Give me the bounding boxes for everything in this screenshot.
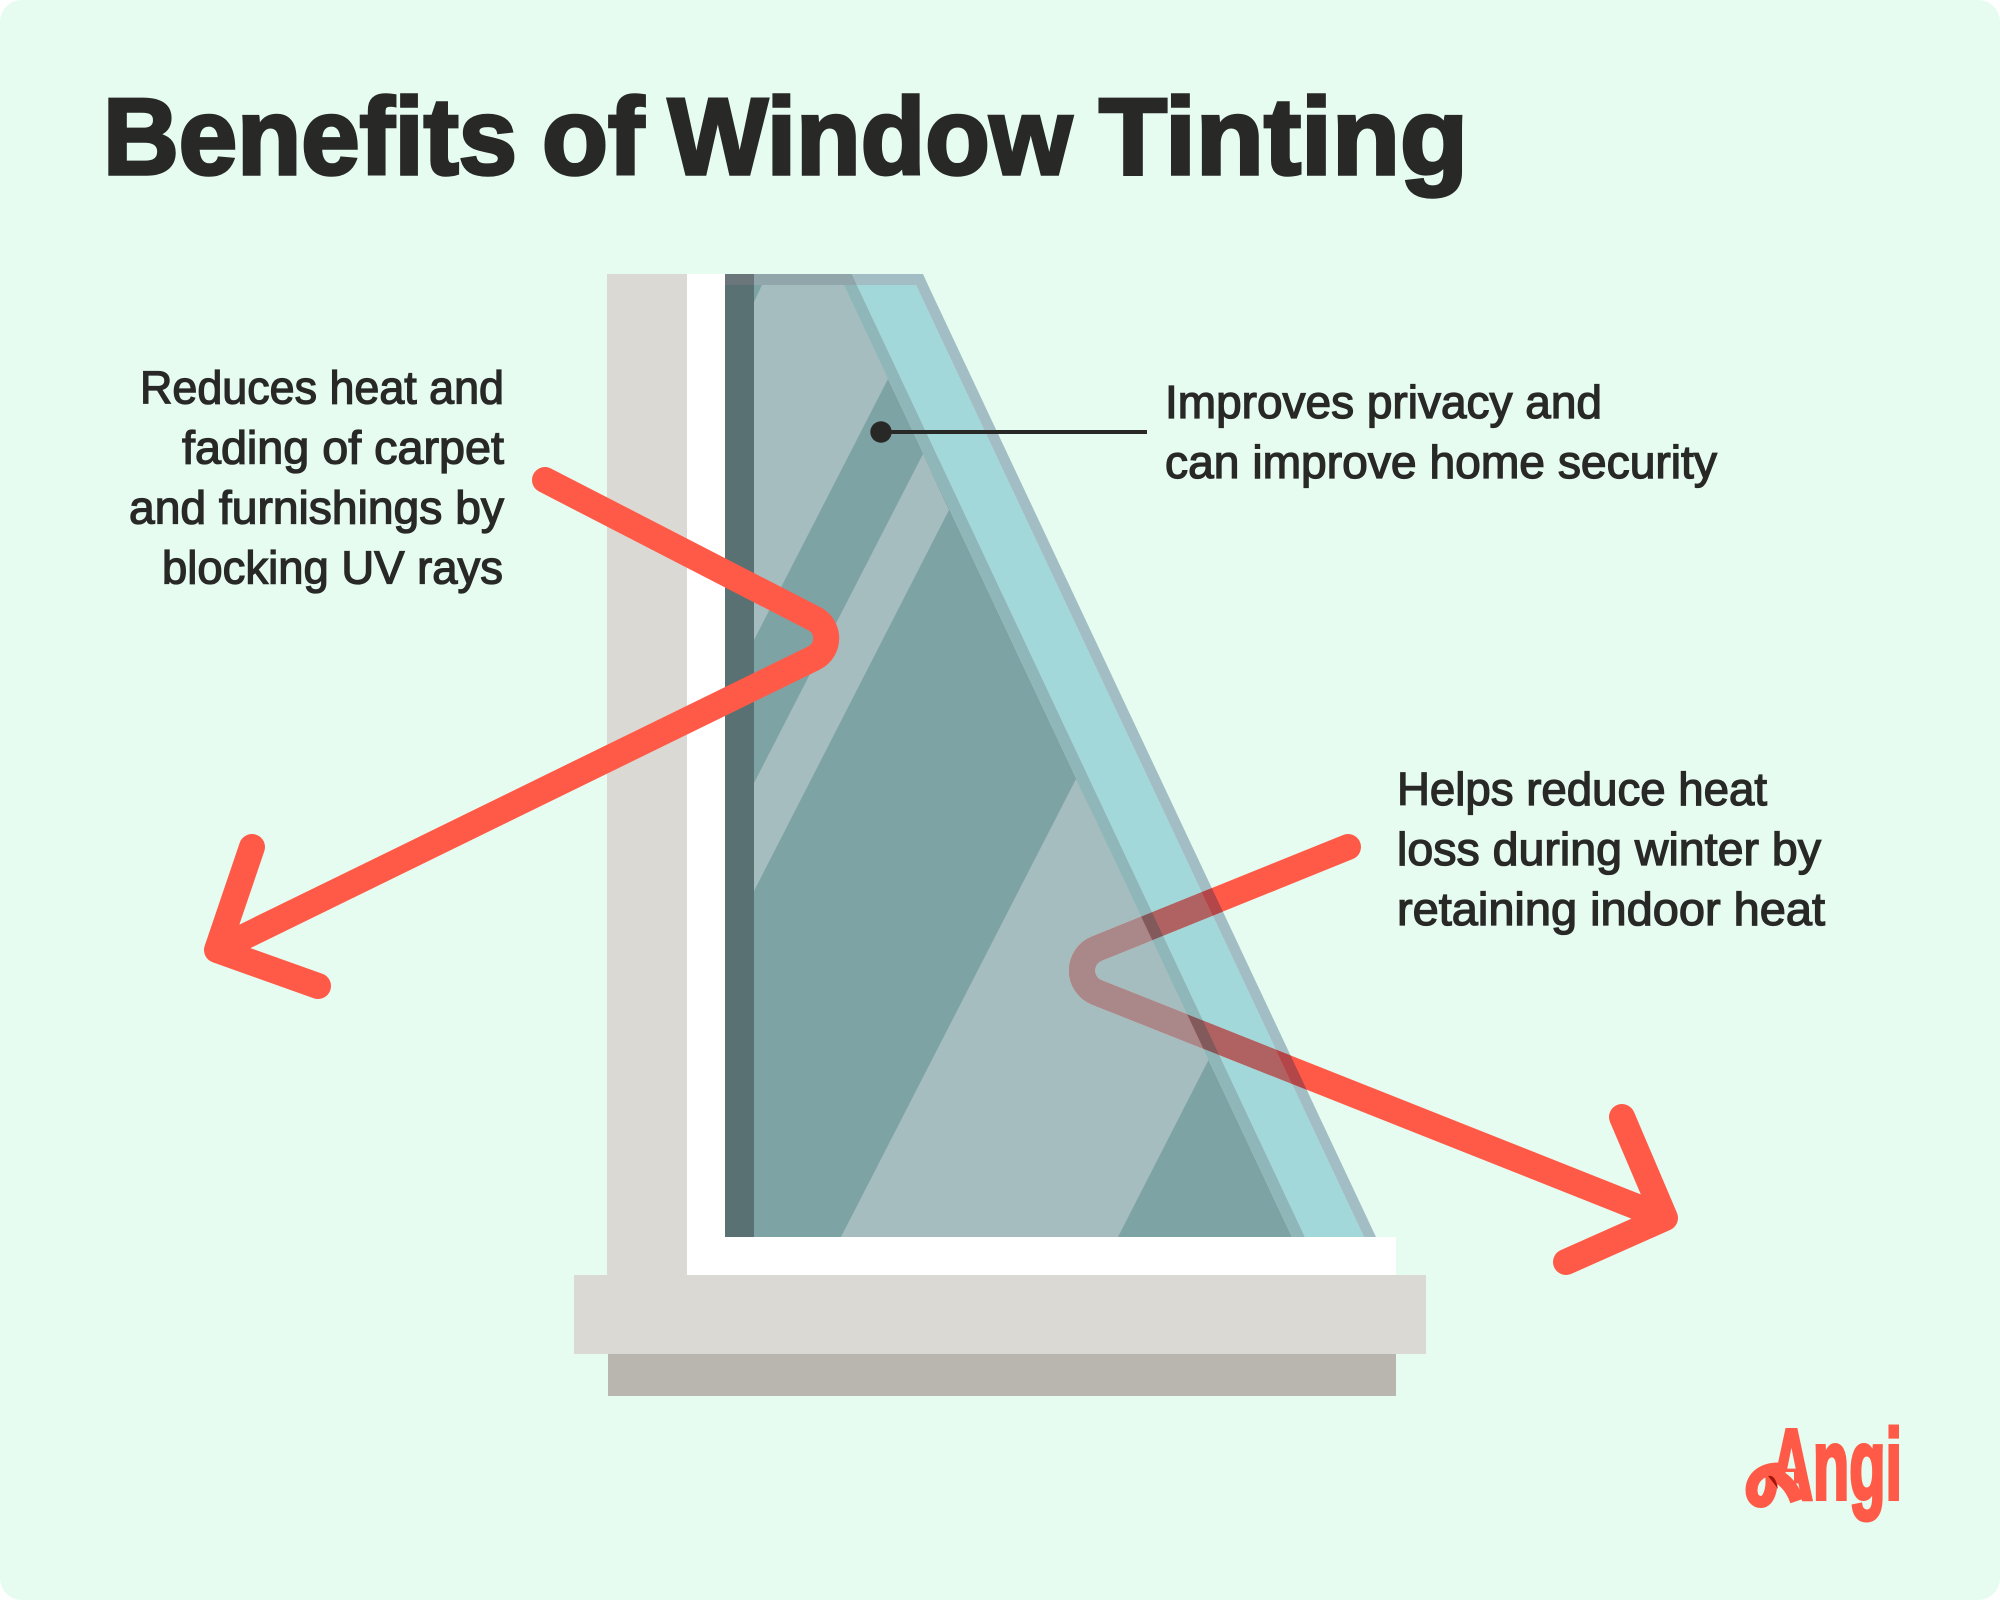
callout: privacy and security: Improves privacy and [1165, 376, 1602, 428]
tint film inner edge [844, 285, 1305, 1237]
tint film outer edge [916, 285, 1376, 1237]
callout: heat loss in winter: loss during winter by [1397, 823, 1821, 875]
callout: heat loss in winter: Helps reduce heat [1397, 763, 1767, 815]
glass reflection lower [841, 779, 1209, 1237]
glass reflection stripe [754, 454, 949, 891]
logo: Angi: Angi [1770, 1409, 1902, 1521]
callout dot and leader line [870, 421, 1147, 443]
callout: privacy and security: can improve home security [1165, 436, 1717, 488]
top edge of tint film [852, 274, 928, 285]
title: Tinting [1099, 76, 1468, 198]
callout: privacy and security [1165, 376, 1717, 488]
callout: heat loss in winter: retaining indoor heat [1397, 883, 1825, 935]
title: Window [668, 76, 1072, 198]
title: Benefits [103, 76, 517, 198]
dark glass edge top [725, 274, 754, 285]
tint film [857, 285, 1364, 1237]
glass pane base [754, 285, 1292, 1237]
callout: reduces heat and fading [129, 362, 504, 594]
logo: Angi [1752, 1409, 1902, 1521]
title: of [542, 76, 645, 198]
callout: reduces heat and fading: Reduces heat and [140, 362, 504, 414]
arrow: UV rays blocked [217, 480, 826, 986]
glass reflection upper [754, 285, 888, 640]
sill shadow [608, 1354, 1396, 1396]
window sill [574, 1275, 1426, 1354]
top edge of glass [754, 274, 857, 285]
dark glass edge [725, 285, 754, 1237]
wall frame [607, 274, 687, 1284]
callout: reduces heat and fading: blocking UV rays [162, 542, 503, 594]
arrow: heat retained indoors [1082, 847, 1665, 1262]
callout: reduces heat and fading: and furnishings by [129, 482, 504, 534]
callout: reduces heat and fading: fading of carpet [182, 422, 504, 474]
callout: heat loss in winter [1397, 763, 1825, 935]
title [103, 76, 1468, 198]
window illustration [574, 274, 1426, 1396]
white window frame [687, 274, 1396, 1275]
